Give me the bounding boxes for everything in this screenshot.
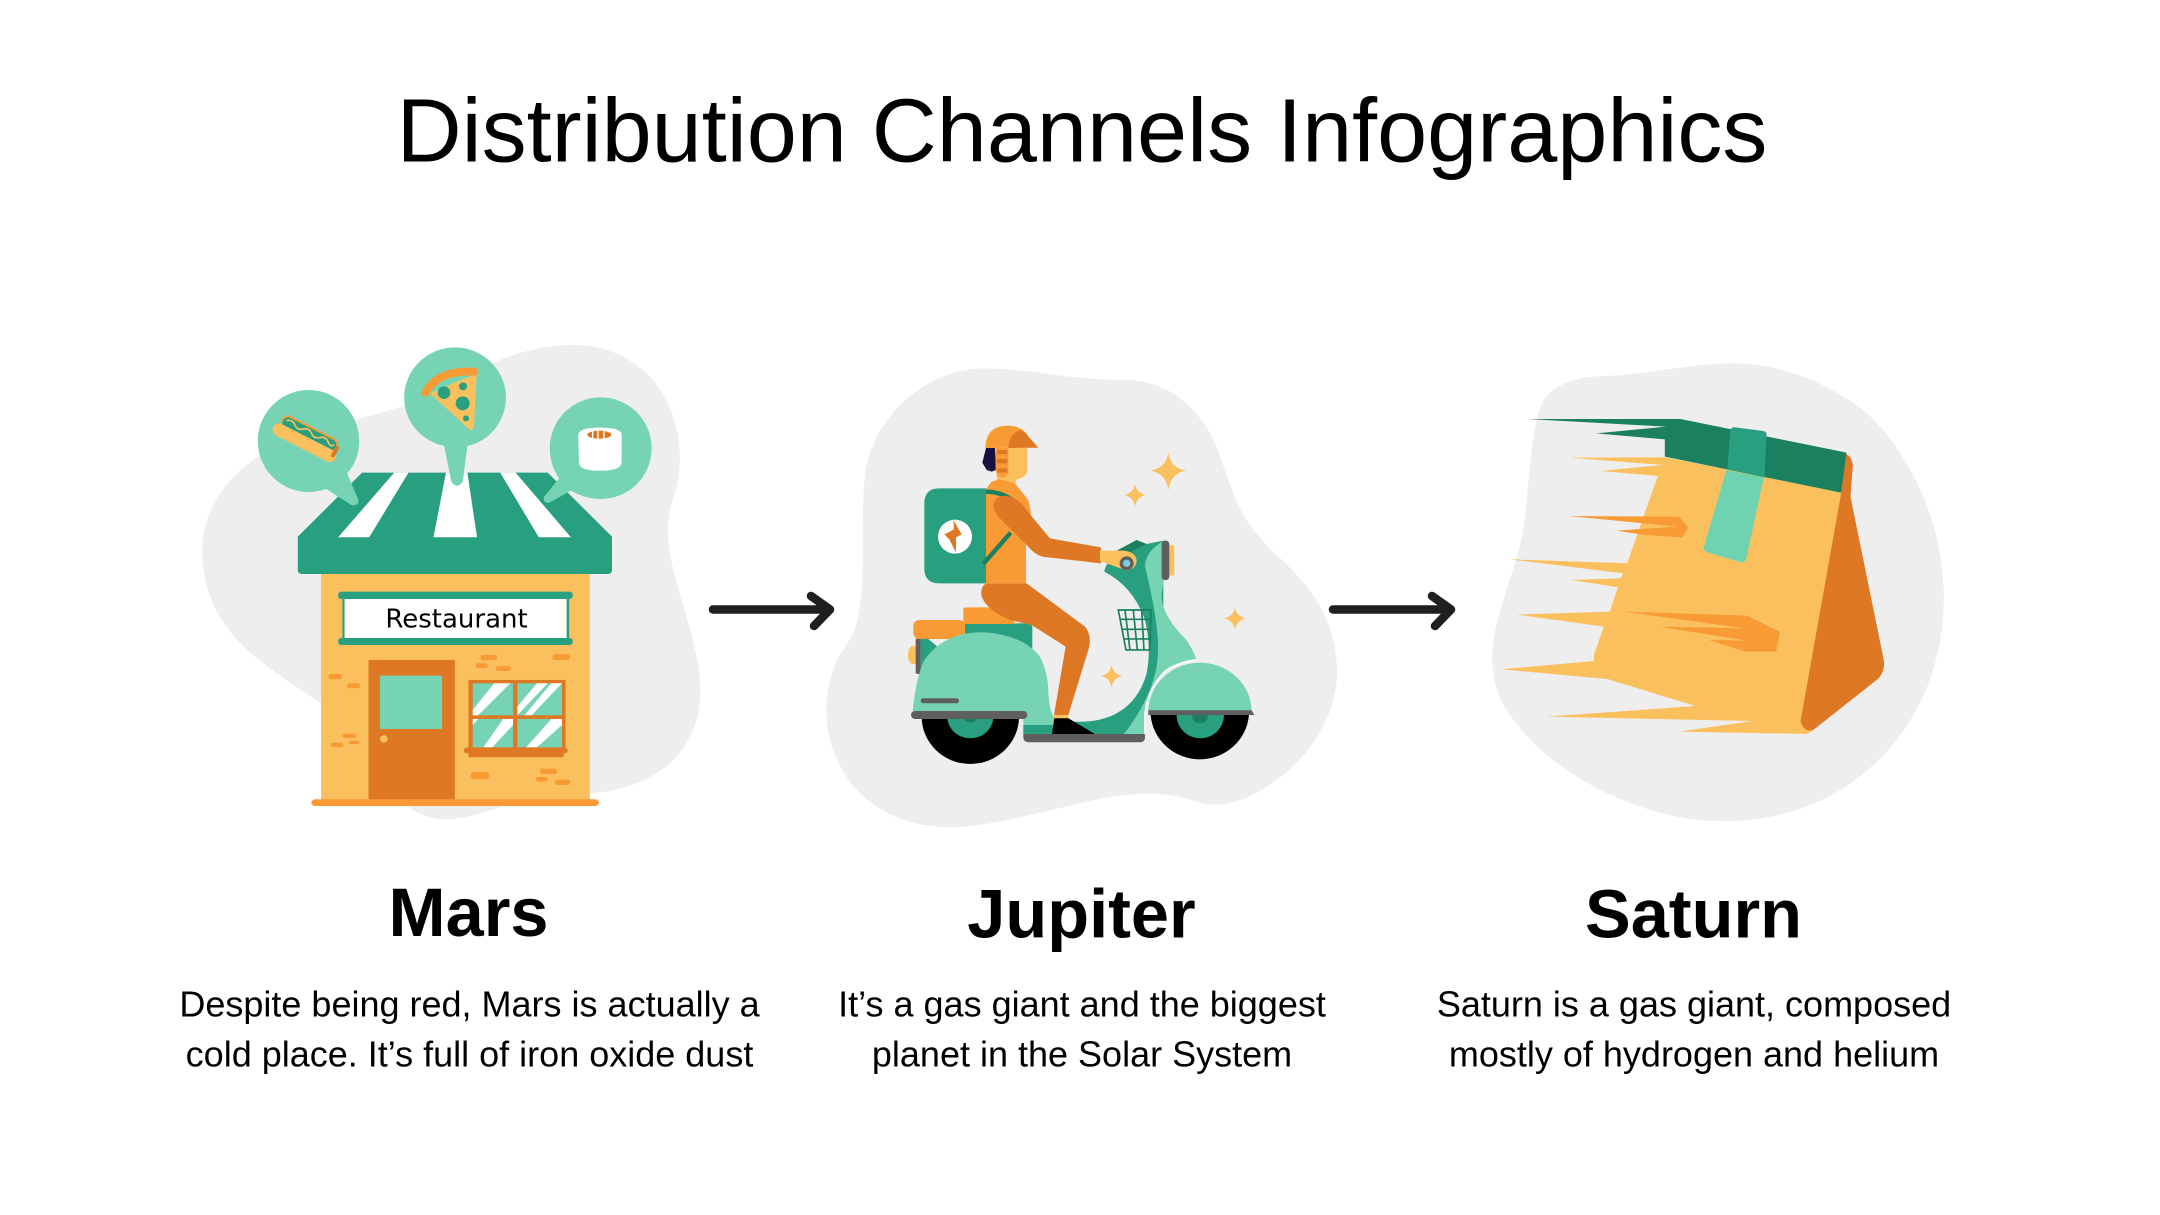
floor board bbox=[1023, 734, 1145, 742]
bag front with speed lines bbox=[1501, 457, 1842, 734]
rider: neck and face bbox=[997, 448, 1027, 484]
large speed mark bbox=[1624, 612, 1780, 652]
front fender bar bbox=[1148, 710, 1254, 715]
background blob bbox=[202, 345, 701, 819]
rider: shoe bbox=[1052, 718, 1095, 734]
column: Jupiter bbox=[838, 876, 1326, 1074]
background blob bbox=[1492, 363, 1944, 821]
backpack straps bbox=[983, 492, 1023, 564]
icon: hot dog bbox=[270, 411, 344, 464]
leg shield mint bbox=[1124, 541, 1197, 734]
description: Jupiter: It’s a gas giant and the biggest bbox=[838, 984, 1326, 1024]
description: Mars: cold place. It’s full of iron oxide dust bbox=[186, 1034, 753, 1074]
rider: ankle bbox=[1054, 715, 1068, 719]
rider: torso bbox=[986, 479, 1031, 583]
panel: Jupiter scooter illustration bbox=[826, 368, 1337, 827]
seat bbox=[963, 607, 1017, 624]
under-seat panel bbox=[965, 623, 1032, 653]
bricks bbox=[329, 654, 570, 785]
basket bbox=[1118, 610, 1151, 650]
rider: arm bbox=[993, 496, 1101, 563]
backpack bbox=[924, 488, 986, 583]
small speed mark bbox=[1569, 516, 1688, 538]
description: Saturn: Saturn is a gas giant, composed bbox=[1437, 984, 1951, 1024]
heading: Jupiter: Jupiter bbox=[967, 876, 1196, 952]
icon: pizza slice bbox=[426, 372, 477, 430]
panel: Saturn delivery bag illustration bbox=[1492, 363, 1944, 821]
window bbox=[464, 680, 568, 757]
sign label: Restaurant bbox=[385, 604, 528, 634]
description: Mars: Despite being red, Mars is actually a bbox=[179, 984, 761, 1024]
rider: helmet bbox=[985, 426, 1038, 478]
awning stripes bbox=[338, 473, 571, 537]
fender highlight bbox=[1145, 660, 1197, 734]
rear rack bbox=[913, 620, 965, 639]
arrow: Jupiter to Saturn bbox=[1333, 596, 1451, 626]
description: Saturn: mostly of hydrogen and helium bbox=[1449, 1034, 1939, 1074]
bubble: pizza bbox=[404, 347, 506, 486]
tab dark bbox=[1727, 427, 1767, 477]
description: Jupiter: planet in the Solar System bbox=[872, 1034, 1292, 1074]
building wall bbox=[321, 572, 590, 800]
handlebar top bbox=[1117, 540, 1147, 554]
column: Saturn bbox=[1437, 876, 1951, 1074]
body trim bbox=[921, 698, 959, 703]
scooter rear light and tail bbox=[908, 638, 937, 674]
background blob bbox=[826, 368, 1337, 827]
rear body bbox=[913, 632, 1054, 734]
column: Mars bbox=[179, 874, 761, 1074]
bubble: hot dog bbox=[258, 390, 359, 505]
front fender bbox=[1148, 663, 1252, 712]
bag side bbox=[1800, 453, 1884, 731]
icon: sushi roll bbox=[578, 428, 622, 471]
door bbox=[368, 660, 455, 800]
rider: hand bbox=[1100, 551, 1137, 571]
rear fender bar bbox=[911, 711, 1027, 719]
arrow: Mars to Jupiter bbox=[713, 596, 830, 626]
title: Distribution Channels Infographics bbox=[397, 82, 1767, 182]
rider: hair bbox=[982, 448, 996, 472]
panel: Mars restaurant illustration bbox=[202, 345, 701, 819]
tab mint bbox=[1704, 470, 1764, 562]
head light bbox=[1168, 545, 1174, 576]
leg shield teal bbox=[1073, 541, 1163, 734]
handle grip bbox=[1120, 556, 1134, 570]
sparkles bbox=[1101, 452, 1246, 688]
rider: legs bbox=[981, 583, 1090, 715]
heading: Mars: Mars bbox=[389, 874, 548, 951]
sign board bbox=[338, 592, 573, 645]
floor base teal bbox=[1023, 725, 1053, 734]
mirror post bbox=[1162, 541, 1169, 580]
awning roof bbox=[298, 473, 612, 574]
rear wheel bbox=[922, 717, 1019, 764]
bag fold bbox=[1527, 419, 1846, 493]
base ledge bbox=[311, 799, 599, 806]
front wheel bbox=[1151, 715, 1249, 759]
heading: Saturn: Saturn bbox=[1585, 876, 1802, 952]
bubble: sushi bbox=[544, 397, 652, 503]
